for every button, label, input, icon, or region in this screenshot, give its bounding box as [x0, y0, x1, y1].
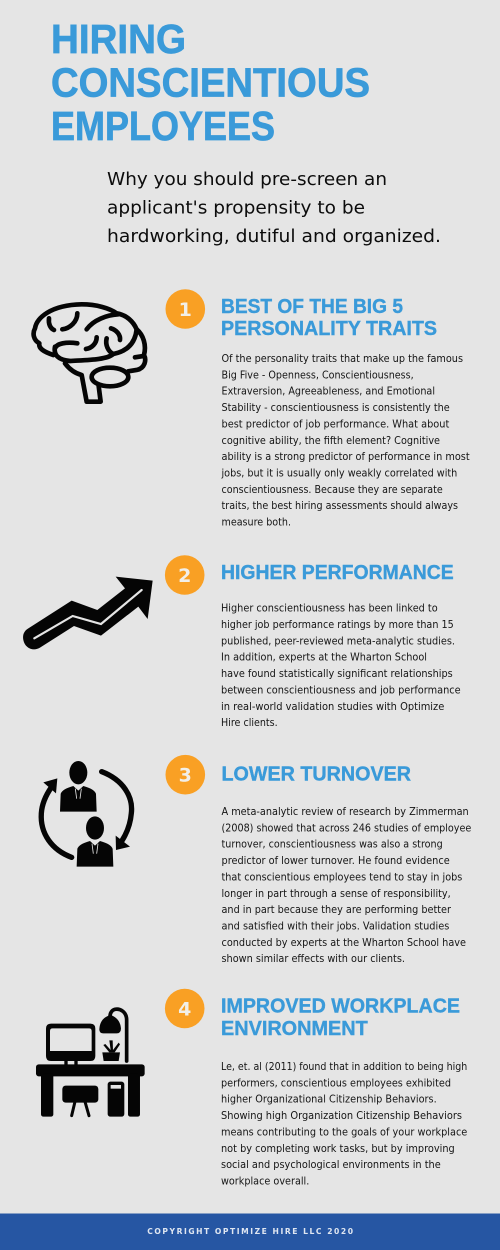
body text: section 2: published, peer-reviewed meta-analytic studies.: [221, 636, 455, 647]
body text: section 3: and satisfied with their jobs. Validation studies: [222, 922, 449, 932]
body text: section 3: (2008) showed that across 246 studies of employee: [222, 823, 471, 834]
body text: section 2: in real-world validation studies with Optimize: [221, 702, 444, 713]
body text: section 4: performers, conscientious employees exhibited: [221, 1078, 451, 1089]
icon: brain: [34, 304, 145, 402]
body text: section 1: measure both.: [222, 518, 291, 528]
body text: section 2: In addition, experts at the Wharton School: [221, 653, 427, 664]
body text: section 2: higher job performance ratings by more than 15: [221, 620, 454, 631]
badge: number 4: 4: [178, 998, 191, 1020]
badge: number 3: 3: [179, 765, 192, 787]
icon: rising arrow: [23, 577, 153, 649]
subtitle: hardworking, dutiful and organized.: [107, 226, 441, 247]
subtitle: Why you should pre-screen an: [107, 169, 387, 190]
body text: section 4: workplace overall.: [221, 1176, 309, 1188]
heading: best of the big 5: BEST OF THE BIG 5: [221, 295, 403, 318]
body text: section 3: turnover, conscientiousness was also a strong: [222, 840, 443, 851]
body text: section 1: ability is a strong predictor of performance in most: [222, 452, 470, 463]
body text: section 1: Stability - conscientiousness is consistently the: [222, 403, 450, 414]
body text: section 2: [221, 604, 461, 729]
badge: number 2: 2: [178, 565, 191, 587]
body text: section 3: longer in part through a sense of responsibility,: [222, 889, 451, 900]
body text: section 1: traits, the best hiring assessments should always: [222, 501, 458, 512]
badge: number 2: [165, 555, 204, 595]
body text: section 2: Higher conscientiousness has been linked to: [221, 604, 438, 615]
body text: section 3: predictor of lower turnover. He found evidence: [222, 856, 450, 867]
heading: improved workplace environment: IMPROVED WORKPLACE: [221, 995, 460, 1018]
body text: section 3: conducted by experts at the Wharton School have: [222, 938, 466, 949]
body text: section 4: means contributing to the goals of your workplace: [221, 1127, 467, 1138]
heading: best of the big 5: PERSONALITY TRAITS: [221, 317, 437, 340]
body text: section 3: that conscientious employees tend to stay in jobs: [222, 872, 462, 883]
body text: section 3: [222, 807, 471, 965]
body text: section 4: Showing high Organization Citizenship Behaviors: [221, 1111, 462, 1122]
body text: section 4: not by completing work tasks, but by improving: [221, 1144, 455, 1155]
panel: section 2 higher performance: [23, 555, 461, 729]
footer copyright text: COPYRIGHT OPTIMIZE HIRE LLC 2020: [147, 1227, 353, 1236]
title: HIRING: [51, 16, 186, 62]
footer band: [0, 1214, 500, 1250]
body text: section 2: between conscientiousness and job performance: [221, 685, 461, 696]
body text: section 1: cognitive ability, the fifth element? Cognitive: [222, 436, 440, 447]
body text: section 4: Le, et. al (2011) found that in addition to being high: [221, 1062, 467, 1073]
badge: number 1: [166, 289, 205, 329]
body text: section 2: have found statistically significant relationships: [221, 669, 453, 680]
title: CONSCIENTIOUS: [51, 59, 370, 105]
badge: number 3: [166, 755, 205, 794]
body text: section 2: Hire clients.: [221, 718, 278, 729]
body text: section 1: Of the personality traits that make up the famous: [222, 354, 463, 365]
body text: section 3: A meta-analytic review of research by Zimmerman: [222, 807, 469, 818]
body text: section 4: social and psychological environments in the: [221, 1160, 441, 1171]
heading: best of the big 5: [221, 295, 437, 340]
body text: section 1: jobs, but it is usually only weakly correlated with: [221, 468, 457, 480]
title: [51, 16, 370, 149]
body text: section 1: conscientiousness. Because they are separate: [222, 485, 443, 496]
heading: improved workplace environment: [221, 995, 460, 1040]
heading: improved workplace environment: ENVIRONMENT: [221, 1017, 368, 1040]
icon: desk with computer and lamp: [36, 1009, 145, 1117]
body text: section 1: Extraversion, Agreeableness, and Emotional: [222, 387, 435, 398]
title: EMPLOYEES: [51, 103, 275, 149]
badge: number 1: 1: [179, 299, 192, 321]
icon: employee turnover cycle: [41, 761, 132, 867]
panel: section 4 improved workplace environment: [36, 989, 467, 1188]
badge: number 4: [165, 989, 204, 1028]
panel: section 1 best of the big 5: [34, 289, 470, 528]
body text: section 3: and in part because they are performing better: [222, 905, 452, 916]
subtitle: [107, 169, 441, 247]
body text: section 1: Big Five - Openness, Conscientiousness,: [222, 370, 414, 381]
subtitle: applicant's propensity to be: [107, 198, 365, 218]
heading: lower turnover: LOWER TURNOVER: [222, 762, 411, 785]
body text: section 1: best predictor of job performance. What about: [222, 419, 449, 430]
body text: section 1: [221, 354, 470, 528]
panel: section 3 lower turnover: [41, 755, 471, 965]
heading: higher performance: HIGHER PERFORMANCE: [221, 561, 454, 584]
body text: section 3: shown similar effects with our clients.: [222, 954, 405, 965]
body text: section 4: [221, 1062, 467, 1188]
body text: section 4: higher Organizational Citizenship Behaviors.: [221, 1095, 437, 1106]
